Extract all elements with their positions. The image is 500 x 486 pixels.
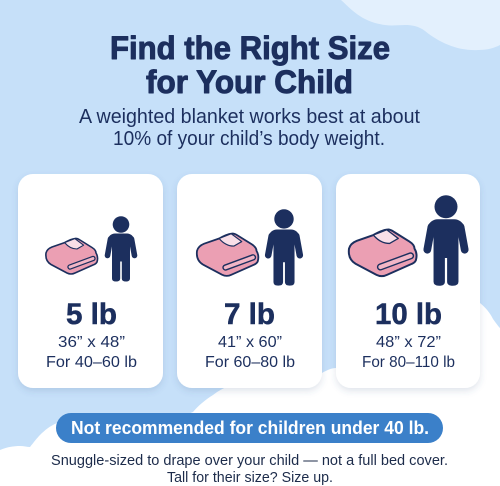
background cloud: top right — [341, 0, 500, 50]
weight label: 7 lb — [224, 298, 275, 331]
weight label: 10 lb — [375, 298, 442, 331]
card background — [336, 174, 480, 388]
subtitle — [79, 106, 420, 150]
icon: folded blanket medium — [197, 233, 258, 276]
footnote — [51, 453, 448, 486]
title: for Your Child — [146, 64, 353, 100]
subtitle: A weighted blanket works best at about — [79, 106, 420, 128]
card background — [177, 174, 322, 388]
dimensions: 48” x 72” — [376, 334, 441, 351]
icon: child large — [427, 195, 465, 286]
background cloud: bottom white — [0, 295, 500, 486]
panel: 7 lb card — [177, 174, 322, 388]
child weight range: For 80–110 lb — [362, 354, 455, 371]
footnote: Snuggle-sized to drape over your child — not a full bed cover. — [51, 453, 448, 469]
icon: child small — [108, 216, 134, 282]
card background — [18, 174, 163, 388]
icon: folded blanket small — [46, 238, 98, 274]
weight label: 5 lb — [66, 298, 117, 331]
dimensions: 41” x 60” — [218, 334, 282, 351]
footnote: Tall for their size? Size up. — [167, 470, 333, 486]
dimensions: 36” x 48” — [58, 334, 125, 351]
title — [110, 30, 390, 100]
callout: age warning pill — [56, 413, 443, 443]
icon: child medium — [268, 209, 300, 286]
title: Find the Right Size — [110, 30, 390, 66]
panel: 5 lb card — [18, 174, 163, 388]
panel: 10 lb card — [336, 174, 480, 388]
subtitle: 10% of your child’s body weight. — [113, 128, 385, 150]
callout: age warning pill: Not recommended for children under 40 lb. — [71, 418, 429, 438]
child weight range: For 40–60 lb — [46, 354, 137, 371]
child weight range: For 60–80 lb — [205, 354, 295, 371]
icon: folded blanket large — [349, 230, 417, 276]
